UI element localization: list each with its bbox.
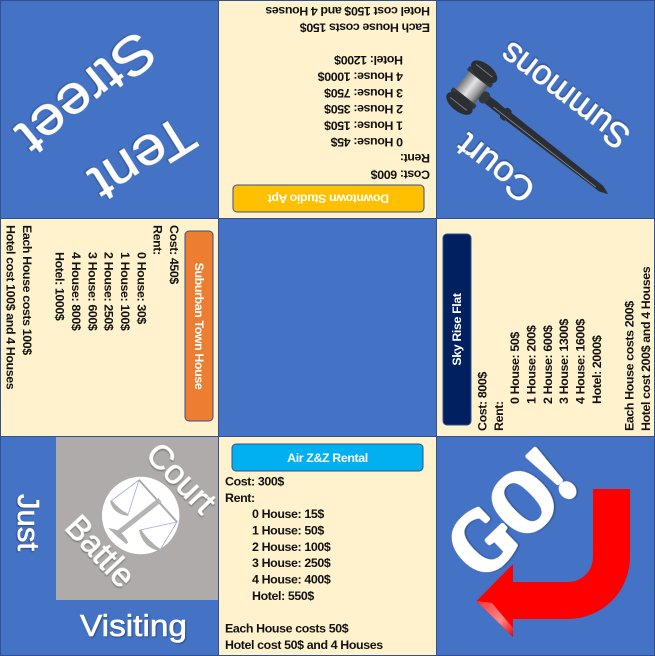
panel: Downtown Studio Apt card [218, 0, 436, 218]
label: Street: Street [5, 19, 167, 167]
text: property details: Rent: [151, 225, 165, 255]
card content [225, 444, 423, 652]
text: property details: 4 House: 1600$ [574, 319, 588, 404]
text: property details: 2 House: 350$ [324, 102, 403, 116]
text: property details: 3 House: 250$ [252, 556, 331, 570]
text: property details [4, 225, 181, 390]
text: property details: Cost: 600$ [371, 168, 430, 182]
text: property details: 2 House: 600$ [541, 325, 555, 404]
text: property details: Hotel cost 100$ and 4 Houses [4, 225, 18, 390]
text: property details: Hotel: 550$ [252, 589, 314, 603]
text: property details: 2 House: 100$ [252, 540, 331, 554]
text: property details: Hotel cost 200$ and 4 Houses [639, 266, 653, 431]
text: property details: Hotel: 2000$ [590, 335, 604, 404]
text: property details: 1 House: 100$ [118, 252, 132, 331]
text: property details: Each House costs 200$ [623, 301, 637, 431]
header: Downtown Studio Apt [233, 185, 424, 212]
text: property details: 3 House: 1300$ [557, 319, 571, 404]
text: property details: Each House costs 100$ [20, 225, 34, 355]
header: Sky Rise Flat [443, 234, 471, 425]
text: property details [265, 4, 430, 182]
text: property details [476, 266, 653, 431]
panel: Sky Rise Flat card [436, 218, 654, 436]
header: Sky Rise Flat: Sky Rise Flat [450, 293, 464, 366]
label: Summons: Summons [493, 34, 638, 156]
text: property details: Hotel cost 150$ and 4 Houses [265, 4, 430, 18]
text: property details: 1 House: 200$ [524, 325, 538, 404]
header: Downtown Studio Apt: Downtown Studio Apt [268, 192, 389, 206]
text: property details: Cost: 800$ [476, 372, 490, 431]
text: property details: Hotel: 1000$ [53, 252, 67, 321]
text: property details: 3 House: 750$ [324, 86, 403, 100]
tile: Tent Street corner [0, 0, 218, 218]
text: property details: 0 House: 30$ [134, 252, 148, 324]
text: property details: Each House costs 150$ [300, 20, 430, 34]
label: Battle: Battle [58, 508, 143, 595]
tile: Just Visiting and Court Battle corner [0, 435, 224, 656]
text: property details: 0 House: 50$ [508, 332, 522, 404]
text: property details: 2 House: 250$ [102, 252, 116, 331]
text: property details: Hotel cost 50$ and 4 Houses [225, 638, 383, 652]
card content rotated 180 degrees [233, 4, 430, 212]
text: property details [225, 474, 383, 652]
text: property details: 4 House: 1000$ [318, 69, 403, 83]
header: Air Z&Z Rental [232, 444, 423, 471]
text: property details: 1 House: 150$ [324, 118, 403, 132]
tile: GO corner [428, 431, 654, 656]
label: Just: Just [11, 494, 46, 551]
panel: Suburban Town House card [0, 218, 218, 436]
card content rotated -90 degrees [443, 234, 653, 431]
label: GO!: GO! [428, 431, 595, 596]
text: property details: 4 House: 400$ [252, 573, 331, 587]
label: Visiting: Visiting [80, 608, 187, 643]
text: property details: Cost: 300$ [225, 474, 284, 488]
text: property details: 1 House: 50$ [252, 524, 324, 538]
icon: scales of justice [102, 477, 179, 554]
arrow: red start arrow [476, 489, 630, 637]
text: property details: Hotel: 1200$ [334, 53, 403, 67]
panel: Court Battle grey square [56, 435, 224, 600]
label: Court: Court [449, 125, 543, 211]
label: Court: Court [138, 435, 224, 522]
text: property details: Each House costs 50$ [225, 622, 349, 636]
text: property details: 0 House: 45$ [331, 135, 403, 149]
card content rotated 90 degrees [4, 225, 213, 421]
text: property details: Rent: [225, 491, 255, 505]
header: Air Z&Z Rental: Air Z&Z Rental [287, 451, 368, 465]
text: property details: Rent: [492, 401, 506, 431]
panel: centre of board [218, 218, 436, 436]
text: property details: 4 House: 800$ [69, 252, 83, 331]
text: property details: Cost: 450$ [167, 225, 181, 284]
tile: Court Summons corner [436, 0, 654, 218]
text: property details: Rent: [400, 151, 430, 165]
icon: gavel [442, 56, 625, 216]
panel: Air Z&Z Rental card [218, 436, 436, 656]
text: property details: 3 House: 600$ [85, 252, 99, 331]
label: Tent: Tent [79, 103, 206, 213]
header: Suburban Town House: Suburban Town House [192, 263, 206, 390]
text: property details: 0 House: 15$ [252, 507, 324, 521]
header: Suburban Town House [185, 231, 213, 421]
